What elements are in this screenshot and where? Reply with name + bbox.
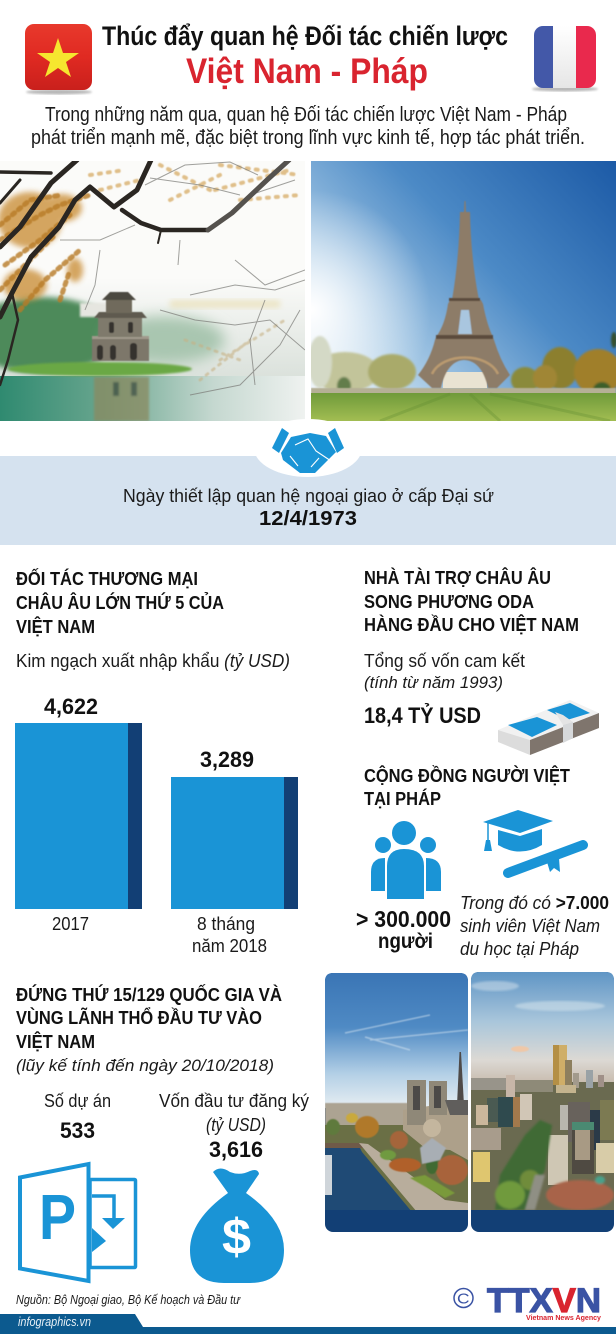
logo: TTXVN Vietnam News Agency: Vietnam News Agency xyxy=(526,1313,602,1322)
bar chart xyxy=(15,694,298,956)
title: Thúc đẩy quan hệ Đối tác chiến lược xyxy=(102,21,508,51)
stat: registered capital xyxy=(159,1091,309,1162)
band: diplomatic relations date: Ngày thiết lập quan hệ ngoại giao ở cấp Đại sứ xyxy=(123,486,494,506)
heading: trade partner: CHÂU ÂU LỚN THỨ 5 CỦA xyxy=(16,592,224,613)
icon: project document xyxy=(20,1164,136,1281)
icon: people xyxy=(371,821,441,899)
panel: trade partner xyxy=(15,568,298,956)
stat: people count: người xyxy=(378,930,433,953)
trees and garden xyxy=(326,1113,468,1198)
heading: ODA donor xyxy=(364,567,579,635)
footer bar: infographics.vn xyxy=(18,1314,91,1329)
logo: TTXVN Vietnam News Agency: TTXVN xyxy=(487,1282,601,1320)
title: Việt Nam - Pháp xyxy=(186,52,428,91)
foliage xyxy=(0,165,300,380)
heading: investment xyxy=(16,984,282,1075)
orange foliage mass xyxy=(0,192,83,301)
tower reflection xyxy=(94,377,149,421)
photo card: Hanoi skyline xyxy=(471,972,614,1232)
thick branches xyxy=(0,160,289,385)
stat: students: du học tại Pháp xyxy=(460,939,579,959)
heading: investment: VÙNG LÃNH THỔ ĐẦU TƯ VÀO xyxy=(16,1007,262,1028)
heading: ODA donor: SONG PHƯƠNG ODA xyxy=(364,592,534,612)
quay xyxy=(359,1143,468,1212)
icon: project document: P xyxy=(39,1181,76,1253)
icon: graduation cap and diploma xyxy=(483,810,583,873)
heading: community: TẠI PHÁP xyxy=(364,788,441,809)
heading: ODA donor: NHÀ TÀI TRỢ CHÂU ÂU xyxy=(364,567,551,588)
building behind tower xyxy=(443,372,487,388)
thin branches xyxy=(60,162,305,395)
bar chart: 2017 xyxy=(52,914,89,934)
photo card: Paris Notre-Dame xyxy=(325,973,468,1232)
photo: Eiffel Tower xyxy=(308,161,616,421)
stat: people count xyxy=(356,906,451,953)
grass stripes xyxy=(380,394,610,421)
heading: investment: VIỆT NAM xyxy=(16,1031,95,1052)
source note: Nguồn: Bộ Ngoại giao, Bộ Kế hoạch và Đầu tư xyxy=(16,1292,241,1307)
heading: ODA donor: HÀNG ĐẦU CHO VIỆT NAM xyxy=(364,614,579,635)
icon: money stack xyxy=(498,700,599,755)
heading: trade partner: ĐỐI TÁC THƯƠNG MẠI xyxy=(16,568,198,589)
title xyxy=(102,21,508,91)
footer bar xyxy=(0,1314,616,1334)
bar chart: 4,622 xyxy=(44,694,98,719)
intro text xyxy=(31,104,585,149)
logo: TTXVN Vietnam News Agency: C xyxy=(457,1290,470,1308)
ODA commitment text xyxy=(364,651,525,728)
bar chart: 8 tháng xyxy=(197,914,255,934)
stat: project count: Số dự án xyxy=(44,1091,111,1111)
panel: Vietnamese community in France xyxy=(356,765,609,959)
ODA commitment text: Tổng số vốn cam kết xyxy=(364,651,525,671)
heading: trade partner: VIỆT NAM xyxy=(16,616,95,637)
stat: project count: 533 xyxy=(60,1118,95,1143)
turtle tower xyxy=(92,292,149,361)
stat: students: sinh viên Việt Nam xyxy=(460,916,600,936)
icon: money bag: $ xyxy=(222,1209,251,1265)
heading: community xyxy=(364,765,570,809)
bar chart: 3,289 xyxy=(200,747,254,772)
notre-dame xyxy=(403,1052,468,1160)
icon: money bag xyxy=(190,1168,284,1283)
heading: community: CỘNG ĐỒNG NGƯỜI VIỆT xyxy=(364,765,570,786)
boulevard greenery xyxy=(495,1120,614,1210)
ODA commitment text: (tính từ năm 1993) xyxy=(364,673,503,692)
trees xyxy=(311,330,616,389)
ODA commitment text: 18,4 TỶ USD xyxy=(364,703,481,728)
heading: trade partner xyxy=(16,568,224,637)
icon: handshake xyxy=(272,428,344,473)
heading: investment: ĐỨNG THỨ 15/129 QUỐC GIA VÀ xyxy=(16,984,282,1005)
gold tower xyxy=(553,1045,559,1085)
icon: Vietnam flag xyxy=(25,24,92,94)
photo: Hanoi Turtle Tower xyxy=(0,160,305,421)
eiffel tower xyxy=(418,201,510,388)
icon: France flag xyxy=(532,26,598,92)
stat: registered capital: 3,616 xyxy=(209,1137,263,1162)
chart subtitle: Kim ngạch xuất nhập khẩu (tỷ USD) xyxy=(16,651,290,671)
bar chart: năm 2018 xyxy=(192,936,267,956)
band: diplomatic relations date: 12/4/1973 xyxy=(259,508,357,530)
buildings xyxy=(471,1070,614,1185)
river xyxy=(325,1148,412,1212)
stat: students: Trong đó có >7.000 xyxy=(460,893,609,913)
stat: people count: > 300.000 xyxy=(356,906,451,932)
panel: ODA donor xyxy=(364,567,599,755)
stat: registered capital: (tỷ USD) xyxy=(206,1115,266,1135)
stat: registered capital: Vốn đầu tư đăng ký xyxy=(159,1091,309,1111)
stat: students xyxy=(460,893,609,959)
heading: investment: (lũy kế tính đến ngày 20/10/2018) xyxy=(16,1056,274,1075)
stat: project count xyxy=(44,1091,111,1143)
panel: investment ranking xyxy=(16,984,309,1283)
band: diplomatic relations date xyxy=(0,419,616,545)
